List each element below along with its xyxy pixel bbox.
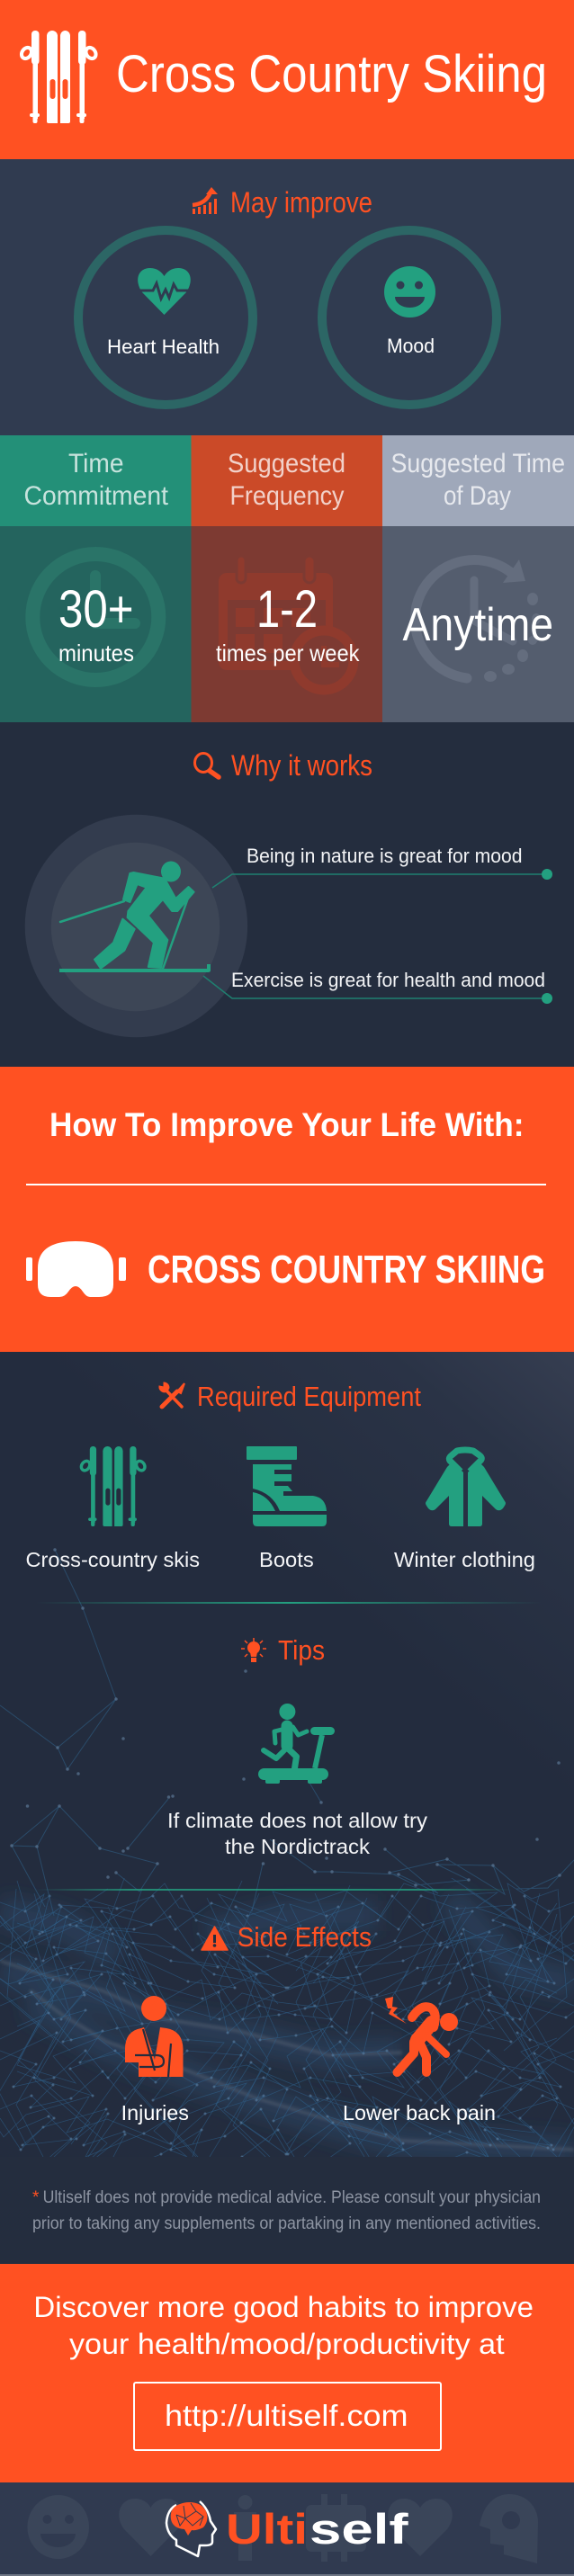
text: tip: If climate does not allow try bbox=[167, 1809, 428, 1832]
panel: suggested frequency bbox=[191, 435, 382, 722]
icon: skier bbox=[59, 862, 211, 972]
panel: how to improve banner bbox=[0, 1067, 574, 1352]
callout: nature bbox=[212, 845, 552, 888]
icon: treadmill runner bbox=[258, 1704, 335, 1784]
panel: call to action bbox=[0, 2264, 574, 2482]
label: mood: Mood bbox=[387, 335, 435, 357]
panel: footer bbox=[0, 2482, 574, 2576]
heading: time commitment: Time bbox=[68, 449, 124, 479]
icon: background clock bbox=[32, 554, 158, 680]
circle backdrop bbox=[25, 815, 247, 1037]
label: heart health: Heart Health bbox=[107, 335, 220, 358]
panel: time commitment bbox=[0, 435, 191, 722]
label: cross-country skis: Cross-country skis bbox=[25, 1548, 200, 1571]
logo: wordmark: self bbox=[309, 2505, 408, 2553]
text: tip: the Nordictrack bbox=[225, 1835, 371, 1858]
label: boots: Boots bbox=[259, 1548, 314, 1571]
text: disclaimer: Ultiself does not provide medical advice. Please consult your physician bbox=[43, 2188, 541, 2207]
heading: suggested time of day bbox=[390, 449, 565, 511]
heading: why it works: Why it works bbox=[231, 749, 372, 782]
heading: suggested time of day: of Day bbox=[444, 481, 511, 511]
benefit: heart health bbox=[78, 230, 253, 405]
icon: light bulb bbox=[241, 1638, 266, 1662]
icon: arm in sling bbox=[125, 1996, 184, 2077]
logo: head and brain bbox=[166, 2501, 216, 2556]
icon: heart with pulse bbox=[137, 268, 192, 315]
item: winter clothing bbox=[394, 1450, 535, 1571]
item: cross-country skis bbox=[25, 1446, 200, 1571]
benefit: mood bbox=[322, 230, 497, 405]
value: 1-2 times per week bbox=[216, 580, 360, 666]
icon: warning triangle bbox=[202, 1927, 228, 1950]
icon: background time cycle bbox=[415, 559, 541, 682]
callout: exercise bbox=[203, 969, 552, 1004]
icon: skis bbox=[79, 1446, 147, 1526]
panel: why it works bbox=[0, 722, 574, 1067]
panel: disclaimer bbox=[0, 2157, 574, 2264]
text: disclaimer: * bbox=[32, 2188, 40, 2207]
callout: exercise: Exercise is great for health and mood bbox=[231, 969, 545, 991]
heading: side effects: Side Effects bbox=[238, 1921, 372, 1953]
value: 1-2 times per week: 1-2 bbox=[256, 580, 318, 639]
panel: equipment, tips and side effects background bbox=[0, 1352, 574, 2178]
text: discover more: Discover more good habits to improve bbox=[33, 2291, 534, 2323]
network pattern bbox=[0, 1876, 574, 2178]
icon: hooded jacket bbox=[426, 1450, 506, 1526]
section: tips bbox=[167, 1634, 428, 1858]
heading: time commitment bbox=[23, 449, 169, 511]
panel: header bbox=[0, 0, 574, 159]
label: lower back pain: Lower back pain bbox=[343, 2101, 496, 2124]
value: 30+ minutes: minutes bbox=[58, 640, 134, 666]
label: injuries: Injuries bbox=[121, 2101, 189, 2124]
section: side effects bbox=[121, 1921, 496, 2124]
logo: wordmark: Ulti bbox=[226, 2505, 308, 2553]
icon: person with back pain bbox=[385, 1997, 458, 2072]
icon: magnifier bbox=[194, 754, 219, 777]
section: required equipment bbox=[25, 1381, 535, 1571]
icon: smiley bbox=[384, 266, 435, 318]
logo bbox=[166, 2501, 408, 2556]
text: discover more: your health/mood/productivity at bbox=[69, 2328, 505, 2360]
heading: how to improve your life with: How To Improve Your Life With: bbox=[49, 1106, 524, 1143]
heading: suggested frequency: Frequency bbox=[230, 481, 344, 511]
callout: nature: Being in nature is great for mood bbox=[247, 845, 522, 867]
heading: time commitment: Commitment bbox=[23, 481, 169, 511]
text: tip bbox=[167, 1809, 428, 1858]
value: anytime: Anytime bbox=[403, 599, 553, 651]
item: boots bbox=[247, 1446, 327, 1571]
value: 30+ minutes bbox=[58, 580, 134, 666]
item: injuries bbox=[121, 1996, 189, 2124]
panel: suggested time of day bbox=[382, 435, 574, 722]
label: winter clothing: Winter clothing bbox=[394, 1548, 535, 1571]
text: disclaimer: prior to taking any supplements or partaking in any mentioned activities. bbox=[32, 2214, 541, 2233]
heading: may improve: May improve bbox=[230, 186, 372, 219]
logo: wordmark bbox=[226, 2505, 408, 2553]
icon: background calendar bbox=[219, 556, 354, 690]
text: discover more bbox=[33, 2291, 534, 2360]
icon: skis and poles bbox=[20, 31, 98, 123]
text: disclaimer bbox=[32, 2188, 541, 2233]
icon: boot bbox=[247, 1446, 327, 1526]
heading: tips: Tips bbox=[278, 1634, 325, 1666]
value: 1-2 times per week: times per week bbox=[216, 640, 360, 666]
panel: may improve bbox=[0, 159, 574, 435]
item: lower back pain bbox=[343, 1997, 496, 2124]
icon: rising chart bbox=[193, 187, 218, 214]
value: 30+ minutes: 30+ bbox=[58, 580, 133, 639]
link button: http://ultiself.com bbox=[165, 2399, 408, 2432]
link button bbox=[134, 2383, 441, 2450]
heading: required equipment: Required Equipment bbox=[197, 1381, 421, 1412]
icon: ski goggles bbox=[26, 1241, 126, 1297]
icon: tools bbox=[159, 1382, 184, 1407]
heading: suggested frequency: Suggested bbox=[228, 449, 345, 479]
heading: suggested frequency bbox=[228, 449, 345, 511]
background icons bbox=[27, 2494, 538, 2563]
